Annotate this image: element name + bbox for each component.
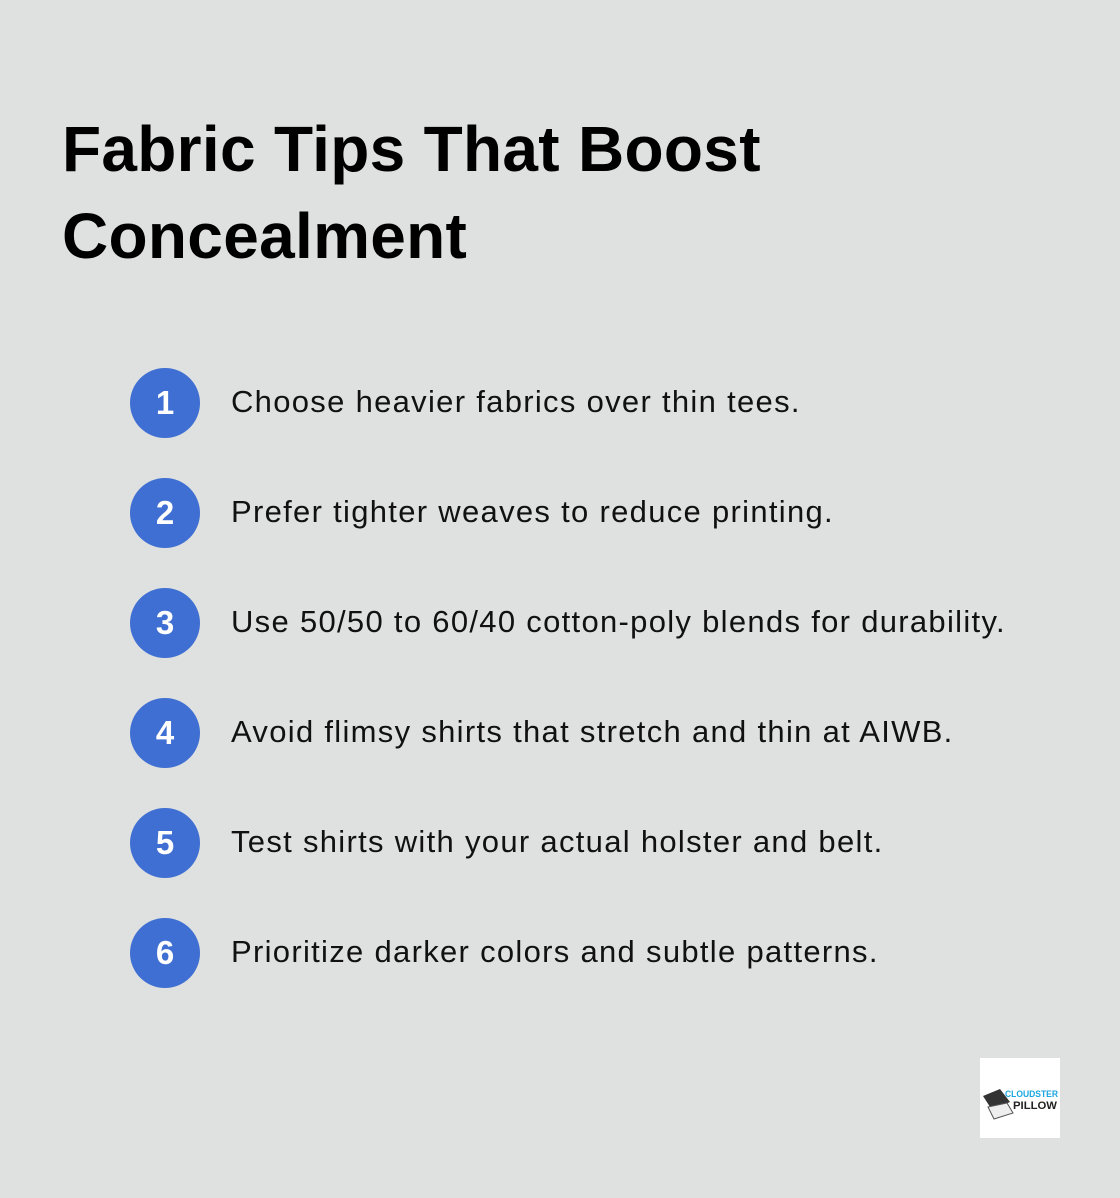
tip 4: Avoid flimsy shirts that stretch and thin at AIWB. bbox=[231, 714, 954, 749]
tip 2: Prefer tighter weaves to reduce printing. bbox=[231, 494, 834, 529]
tip 6 bbox=[130, 918, 879, 988]
tip 5 bbox=[130, 808, 884, 878]
tip 3: 3 bbox=[156, 604, 174, 641]
tip 1 bbox=[130, 368, 801, 438]
tip 1: Choose heavier fabrics over thin tees. bbox=[231, 384, 801, 419]
tip 3 bbox=[130, 588, 1006, 658]
tip 6: 6 bbox=[156, 934, 174, 971]
logo bbox=[980, 1058, 1060, 1138]
tip 4: 4 bbox=[156, 714, 174, 751]
tip 6: Prioritize darker colors and subtle patterns. bbox=[231, 934, 879, 969]
tip 5: Test shirts with your actual holster and belt. bbox=[231, 824, 884, 859]
tip 5: 5 bbox=[156, 824, 174, 861]
title: Fabric Tips That Boost bbox=[62, 113, 761, 185]
tip 1: 1 bbox=[156, 384, 174, 421]
tip 2: 2 bbox=[156, 494, 174, 531]
logo: CLOUDSTER bbox=[1005, 1089, 1058, 1099]
title: Concealment bbox=[62, 200, 467, 272]
logo: PILLOW bbox=[1013, 1100, 1058, 1112]
tip 4 bbox=[130, 698, 954, 768]
tip 3: Use 50/50 to 60/40 cotton-poly blends for durability. bbox=[231, 604, 1006, 639]
tip 2 bbox=[130, 478, 834, 548]
title bbox=[62, 113, 761, 272]
